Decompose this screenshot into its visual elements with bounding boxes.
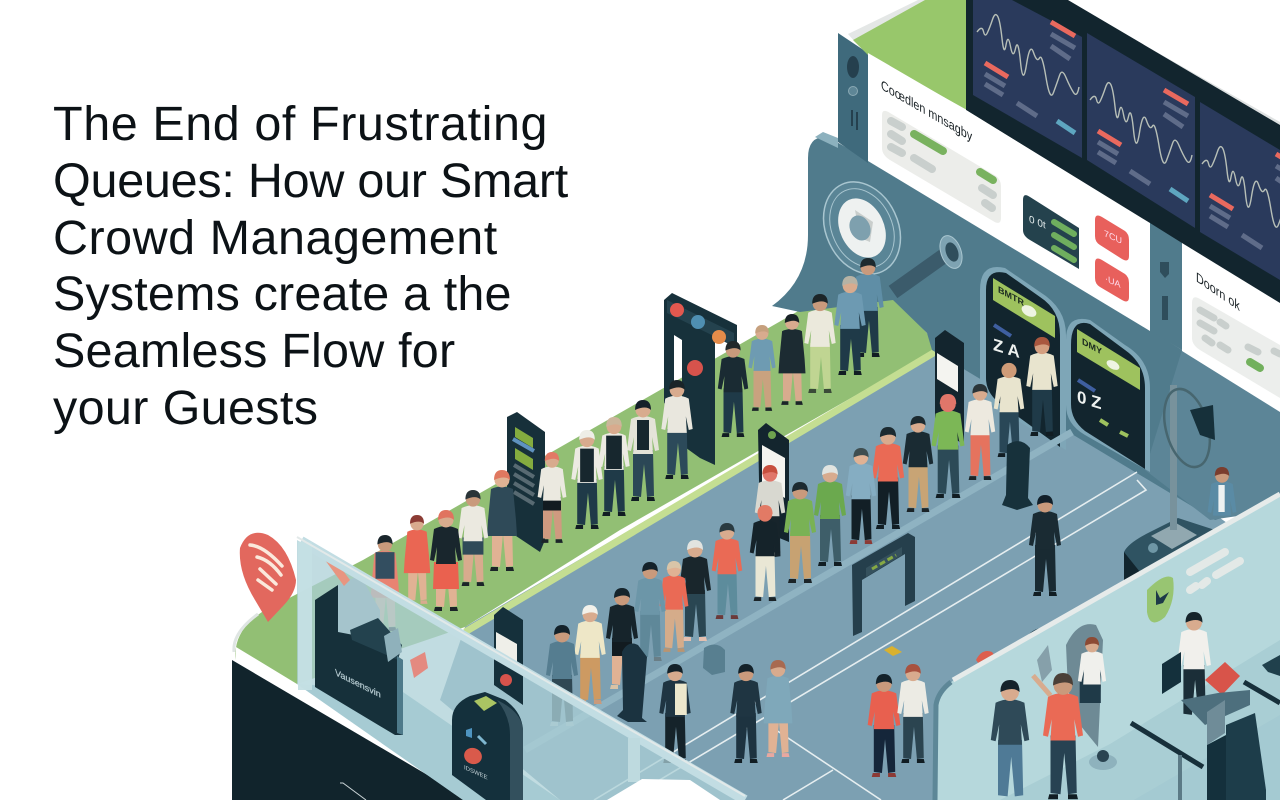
pale foreground wall [935, 494, 1280, 800]
person: dark vest guest [627, 400, 659, 501]
person: red trousers guest [430, 510, 462, 611]
person: green shirt tan pants guest [784, 482, 816, 583]
screen 2 [1087, 33, 1195, 228]
title: The End of Frustrating [53, 97, 548, 151]
red luggage items [1205, 662, 1240, 695]
bollard: dark post [617, 644, 647, 722]
platform base [232, 660, 470, 800]
person: grey haired guest [834, 276, 866, 375]
green queue lane [234, 298, 935, 684]
person: blue jacket guest [852, 258, 884, 357]
archway gate [852, 533, 915, 636]
person: white hat tan trousers guest [574, 605, 606, 704]
red buttons [1095, 216, 1129, 301]
person: white top skirt guest [458, 490, 488, 586]
wall text placeholders [1190, 552, 1240, 590]
person: vest guest with cap [598, 417, 630, 516]
person: guest carrying parcel [659, 664, 691, 763]
guest queue on the green lane [371, 258, 884, 631]
person: red jacket guest [868, 674, 900, 777]
pipe arm [893, 233, 966, 292]
person: red hair guest [755, 465, 785, 557]
red buttons: 7CU [1104, 228, 1122, 247]
dark dashboard board [966, 0, 1280, 304]
person: guest in pale green [804, 294, 836, 393]
green roof panel [853, 0, 967, 110]
photo booth [315, 556, 403, 735]
title: your Guests [53, 381, 318, 435]
wall post 2 [1150, 223, 1182, 350]
counter and railings [1131, 655, 1280, 800]
guest queue in the lobby [546, 337, 1058, 726]
person: red shirt guest waving [1033, 673, 1083, 799]
kiosk screen 1: BMTR [998, 285, 1024, 309]
person: black top tan pants guest [903, 416, 933, 512]
title [53, 97, 568, 435]
title: Seamless Flow for [53, 324, 455, 378]
title: Systems create a the [53, 267, 512, 321]
white panel 2 [1182, 243, 1280, 412]
kiosk screen 2: DMY [1082, 337, 1102, 358]
pink tag [410, 652, 428, 678]
person: black dress guest [778, 314, 806, 405]
person: white shirt red hair guest [897, 664, 929, 763]
person: cream shirt guest [1026, 337, 1058, 436]
info totem: wall [935, 330, 964, 445]
main ticket kiosk: IDSWEE [464, 764, 488, 782]
info totem: green lane [507, 412, 545, 552]
kiosk screen 1 [980, 267, 1066, 450]
person: denim shirt guest [846, 448, 876, 544]
person: guest at kiosk [1078, 637, 1106, 703]
title: Queues: How our Smart [53, 154, 568, 208]
status card: 0 0t [1029, 214, 1046, 232]
glass partition [297, 540, 745, 800]
kiosk screen 1: Z A [993, 334, 1020, 362]
queue divider strip [525, 432, 1072, 750]
person: suit guest [730, 664, 762, 763]
person: blue sweater guest [546, 625, 578, 726]
location pin [240, 533, 296, 622]
person: black shirt white hair guest [679, 540, 711, 641]
floor marker [884, 646, 902, 656]
person: red top guest [712, 523, 742, 619]
title: Crowd Management [53, 211, 498, 265]
kiosk screen 2 [1066, 319, 1150, 472]
person: red hair shorts guest [538, 452, 566, 543]
status card [1023, 195, 1079, 269]
person: guest behind glass [371, 535, 399, 631]
person: tan head guest [994, 363, 1024, 457]
person: white tee guest [661, 380, 693, 479]
wall post [838, 33, 868, 163]
person: grey dress guest [487, 470, 517, 571]
person: blue top guest [748, 325, 776, 411]
screen 3 [1200, 102, 1280, 280]
glass rails [297, 537, 745, 800]
floor guide lines [594, 472, 1146, 800]
lens device [809, 169, 915, 287]
person: white top red pants guest [965, 384, 995, 480]
info totem: behind kiosk [494, 607, 523, 705]
person: red dress guest [404, 515, 430, 604]
bollard: grey bin [703, 644, 725, 675]
waveform charts [977, 15, 1280, 265]
info totem: lobby centre [758, 423, 789, 542]
person: guest in black [1029, 495, 1061, 596]
back wall [772, 132, 1280, 520]
person: seated staff member [1208, 467, 1236, 516]
person: black top cream trousers guest [750, 505, 780, 601]
floor opening [607, 779, 720, 800]
person: blue scrubs guest [634, 562, 666, 661]
blue floor [440, 350, 1280, 800]
person: green shirt guest [932, 394, 964, 498]
main ticket kiosk [452, 692, 523, 800]
person: salmon scarf guest [660, 561, 688, 652]
top strip [848, 0, 930, 42]
photo booth: Vausensvin [335, 667, 381, 701]
person: blue dress guest [764, 660, 792, 757]
person: black shirt guest [718, 341, 748, 437]
person: black shirt short skirt guest [606, 588, 638, 689]
dark queue post [1002, 441, 1033, 510]
white panel 2: Doorn ok [1196, 269, 1240, 314]
person: red shirt guest [872, 427, 904, 529]
person: white cap guest [571, 430, 603, 529]
kiosk screen 2: 0 Z [1077, 386, 1102, 413]
doorway kiosk [1037, 624, 1117, 770]
wall badge icon [1147, 576, 1174, 622]
heads behind the pale wall [976, 628, 1048, 668]
screen 1 [973, 0, 1082, 158]
red buttons: ·UA [1105, 273, 1121, 291]
person: green shirt white hair guest [814, 465, 846, 566]
white panel: crowd status: Coœdlen mnsagby [881, 77, 973, 145]
white panel: crowd status [868, 53, 1150, 331]
person: staff at counter [1177, 612, 1211, 715]
staff bag [1162, 652, 1181, 694]
lamp post and desk [1124, 384, 1218, 592]
traffic light gate [664, 293, 737, 465]
person: blue vest guest [991, 680, 1029, 796]
